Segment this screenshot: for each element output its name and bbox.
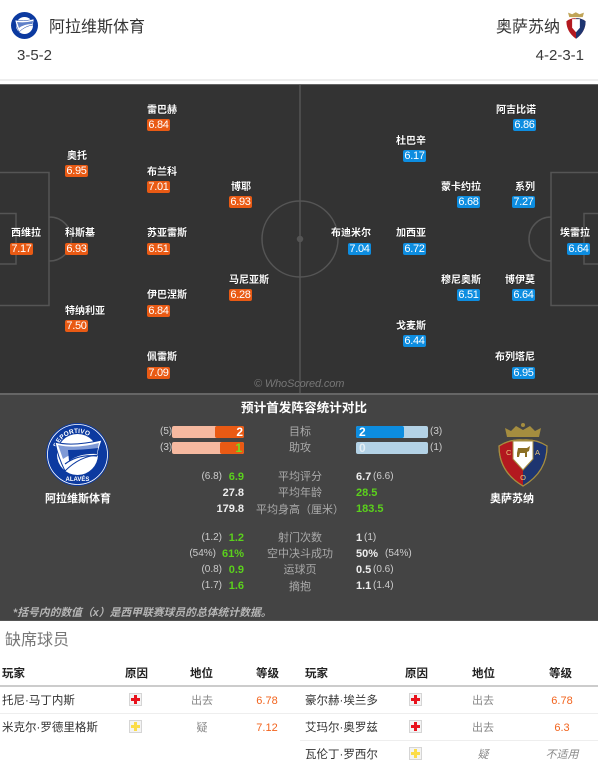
row: 米克尔·罗德里格斯: 疑: [196, 722, 208, 734]
player: 布兰科: [147, 166, 177, 193]
stat labels: 平均评分: [278, 471, 322, 483]
away stat values: [356, 471, 412, 592]
home stat values: (1.2): [201, 532, 222, 543]
row: 托尼·马丁内斯: 托尼·马丁内斯: [2, 695, 75, 707]
player: 雷巴赫: 雷巴赫: [147, 105, 177, 116]
formation: Osasuna: 4-2-3-1: [536, 47, 584, 64]
row: 托尼·马丁内斯: [0, 687, 300, 714]
row: 瓦伦丁·罗西尔: 不适用: [546, 749, 578, 761]
icon: Alaves logo small: [11, 12, 38, 39]
logo: Osasuna: O: [520, 473, 526, 482]
away stat values: 1: [356, 532, 362, 544]
logo label: Osasuna: 奥萨苏纳: [490, 493, 534, 505]
home stat values: 179.8: [216, 503, 244, 515]
row: 米克尔·罗德里格斯: 7.12: [256, 722, 278, 734]
table header: [0, 667, 598, 687]
row: 艾玛尔·奥罗兹: [300, 714, 598, 741]
stat labels: 运球页: [284, 564, 316, 576]
player: 布迪米尔: 布迪米尔: [331, 228, 371, 239]
stat bar: assists away: [356, 441, 442, 455]
player: 特纳利亚: 特纳利亚: [65, 306, 105, 317]
row: 瓦伦丁·罗西尔: 瓦伦丁·罗西尔: [305, 749, 378, 761]
player: 阿吉比诺: [496, 104, 536, 131]
player: 马尼亚斯: 6.28: [230, 289, 251, 301]
row: 豪尔赫·埃兰多: 出去: [472, 695, 494, 707]
stat bar: goals away: [356, 425, 442, 439]
player: 马尼亚斯: 马尼亚斯: [229, 275, 269, 286]
player: 布列塔尼: 布列塔尼: [495, 352, 535, 363]
stat bar: goals home: 2: [236, 425, 243, 439]
row: 豪尔赫·埃兰多: 6.78: [551, 695, 573, 707]
player: 伊巴涅斯: [147, 289, 187, 317]
player: 苏亚雷斯: [147, 226, 187, 255]
bottom divider: [0, 620, 598, 621]
home stat values: 0.9: [229, 564, 244, 576]
logo: Alaves: DEPORTIVO: [53, 428, 90, 446]
stat labels: 目标: [289, 426, 311, 438]
player: 埃雷拉: 埃雷拉: [560, 228, 590, 239]
away stat values: (0.6): [373, 564, 394, 575]
row: 豪尔赫·埃兰多: [300, 687, 598, 714]
stats title: 预计首发阵容统计对比: [241, 401, 367, 415]
player: 博耶: [229, 181, 252, 208]
stat bar: assists home: [160, 441, 244, 455]
away stat values: 1.1: [356, 580, 371, 592]
away stat values: (6.6): [373, 471, 394, 482]
stat bar: goals away: (3): [430, 426, 442, 437]
player: 穆尼奥斯: 6.51: [458, 289, 479, 301]
section heading: 缺席球员: [5, 632, 69, 649]
player: 布迪米尔: [331, 226, 371, 255]
player: 系列: 7.27: [513, 196, 534, 208]
logo: Osasuna: A: [535, 448, 540, 457]
team name: Osasuna: 奥萨苏纳: [496, 19, 560, 36]
home stat values: [189, 471, 244, 592]
away stat values: 0.5: [356, 564, 371, 576]
player: 西维拉: 7.17: [11, 243, 32, 255]
player: 科斯基: 6.93: [66, 243, 87, 255]
row: 艾玛尔·奥罗兹: 出去: [472, 722, 494, 734]
player: 埃雷拉: 6.64: [568, 243, 589, 255]
stat labels: 摘抱: [289, 581, 311, 593]
home stat values: 6.9: [229, 471, 244, 483]
stat labels: 平均身高（厘米）: [256, 504, 344, 516]
player: 科斯基: 科斯基: [65, 228, 95, 239]
player: 杜巴辛: 6.17: [404, 150, 425, 162]
player: 穆尼奥斯: 穆尼奥斯: [441, 275, 481, 286]
table header: 地位: [190, 668, 213, 680]
table header: 等级: [256, 668, 279, 680]
home stat values: 61%: [222, 548, 244, 560]
panel: stats comparison: [0, 393, 598, 621]
team name: Alaves: 阿拉维斯体育: [49, 19, 145, 36]
player: 奥托: [65, 150, 88, 177]
header: Osasuna: [496, 12, 586, 64]
panel: missing players: [0, 621, 598, 781]
row: 艾玛尔·奥罗兹: 艾玛尔·奥罗兹: [305, 722, 378, 734]
table header: 原因: [405, 668, 428, 680]
player: 奥托: 6.95: [66, 165, 87, 177]
home stat values: (54%): [189, 548, 216, 559]
player: 雷巴赫: [147, 104, 177, 131]
stat bar: goals home: (5): [160, 426, 172, 437]
row: 瓦伦丁·罗西尔: 疑: [478, 749, 488, 761]
row: 米克尔·罗德里格斯: [2, 720, 278, 734]
home stat values: (0.8): [201, 564, 222, 575]
table header: 原因: [125, 668, 148, 680]
player: 戈麦斯: [396, 320, 426, 347]
stat bar: goals away: 2: [359, 425, 366, 439]
stat labels: 射门次数: [278, 532, 322, 544]
player: 西维拉: 西维拉: [11, 228, 41, 239]
player: 加西亚: [396, 227, 426, 255]
player: 特纳利亚: 7.50: [66, 320, 87, 332]
home stat values: 1.6: [229, 580, 244, 592]
row: 托尼·马丁内斯: 出去: [191, 695, 213, 707]
stat bar: assists home: 1: [235, 441, 242, 455]
player: 系列: 系列: [515, 182, 535, 193]
player: 苏亚雷斯: 6.51: [148, 243, 169, 255]
player: 阿吉比诺: 阿吉比诺: [496, 105, 536, 116]
player: 博伊莫: 博伊莫: [505, 275, 535, 286]
home stat values: (1.7): [201, 580, 222, 591]
player: 系列: [512, 180, 535, 208]
player: 马尼亚斯: [229, 274, 269, 301]
home stat values: 1.2: [229, 532, 244, 544]
player: 杜巴辛: [396, 134, 426, 162]
away stat values: 50%: [356, 548, 378, 560]
formation: Alaves: 3-5-2: [17, 47, 52, 64]
player: 蒙卡约拉: 蒙卡约拉: [441, 182, 481, 193]
stat labels: 平均年龄: [278, 487, 322, 499]
player: 博耶: 博耶: [231, 182, 251, 193]
player: 布兰科: 7.01: [148, 181, 169, 193]
player: 佩雷斯: 7.09: [148, 367, 169, 379]
player: 埃雷拉: [560, 226, 590, 255]
row: 米克尔·罗德里格斯: 米克尔·罗德里格斯: [2, 722, 98, 734]
player: 博耶: 6.93: [230, 196, 251, 208]
footnote: *括号内的数值（x）是西甲联赛球员的总体统计数据。: [13, 607, 272, 619]
stat bar: assists home: (3): [160, 442, 172, 453]
table header: 地位: [472, 668, 495, 680]
icon: Osasuna logo small: [566, 12, 586, 39]
row: 豪尔赫·埃兰多: 豪尔赫·埃兰多: [305, 695, 378, 707]
header divider: [0, 79, 598, 81]
player: 伊巴涅斯: 6.84: [148, 305, 169, 317]
stat labels: 空中决斗成功: [267, 548, 333, 560]
player: 蒙卡约拉: 6.68: [458, 196, 479, 208]
table header: 等级: [549, 668, 572, 680]
player: 博伊莫: [505, 274, 535, 301]
away stat values: (1.4): [373, 580, 394, 591]
away stat values: 183.5: [356, 503, 384, 515]
player: 西维拉: [10, 226, 41, 255]
player: 戈麦斯: 戈麦斯: [396, 321, 426, 332]
away stat values: 6.7: [356, 471, 371, 483]
away stat values: (1): [364, 532, 376, 543]
header: Alaves: [11, 12, 145, 64]
row: 托尼·马丁内斯: 6.78: [256, 695, 278, 707]
watermark: © WhoScored.com: [254, 378, 344, 390]
player: 杜巴辛: 杜巴辛: [396, 136, 426, 147]
player: 加西亚: 6.72: [404, 243, 425, 255]
stat bar: goals home: [160, 425, 244, 439]
player: 阿吉比诺: 6.86: [514, 119, 535, 131]
panel: pitch: [0, 84, 598, 394]
table header: 玩家: [305, 668, 328, 680]
player: 科斯基: [65, 226, 95, 255]
home stat values: (6.8): [201, 471, 222, 482]
player: 穆尼奥斯: [441, 274, 481, 301]
player: 布列塔尼: [495, 350, 535, 379]
player: 蒙卡约拉: [441, 180, 481, 208]
row: 艾玛尔·奥罗兹: 6.3: [554, 722, 570, 734]
player: 加西亚: 加西亚: [396, 228, 426, 239]
stat bar: assists away: (1): [430, 442, 442, 453]
stat labels: [256, 426, 344, 593]
player: 特纳利亚: [65, 305, 105, 332]
player: 伊巴涅斯: 伊巴涅斯: [147, 290, 187, 301]
player: 戈麦斯: 6.44: [404, 335, 425, 347]
player: 雷巴赫: 6.84: [148, 119, 169, 131]
player: 苏亚雷斯: 苏亚雷斯: [147, 228, 187, 239]
table header: 玩家: [2, 668, 25, 680]
player: 佩雷斯: [147, 351, 177, 379]
player: 博伊莫: 6.64: [513, 289, 534, 301]
logo label: Alaves: 阿拉维斯体育: [45, 493, 111, 505]
away stat values: (54%): [385, 548, 412, 559]
pitch markings: [0, 85, 598, 393]
player: 布列塔尼: 6.95: [513, 367, 534, 379]
stat labels: 助攻: [289, 442, 311, 454]
player: 佩雷斯: 佩雷斯: [147, 352, 177, 363]
player: 布迪米尔: 7.04: [349, 243, 370, 255]
logo: Osasuna: [498, 423, 548, 487]
logo: Alaves: ALAVÉS: [66, 475, 89, 483]
player: 布兰科: 布兰科: [147, 167, 177, 178]
away stat values: 28.5: [356, 487, 377, 499]
stat bar: assists away: 0: [359, 441, 366, 455]
player: 奥托: 奥托: [67, 151, 87, 162]
logo: Alaves: [46, 423, 109, 486]
row: 瓦伦丁·罗西尔: [305, 747, 580, 761]
logo: Osasuna: C: [506, 448, 512, 457]
home stat values: 27.8: [223, 487, 244, 499]
